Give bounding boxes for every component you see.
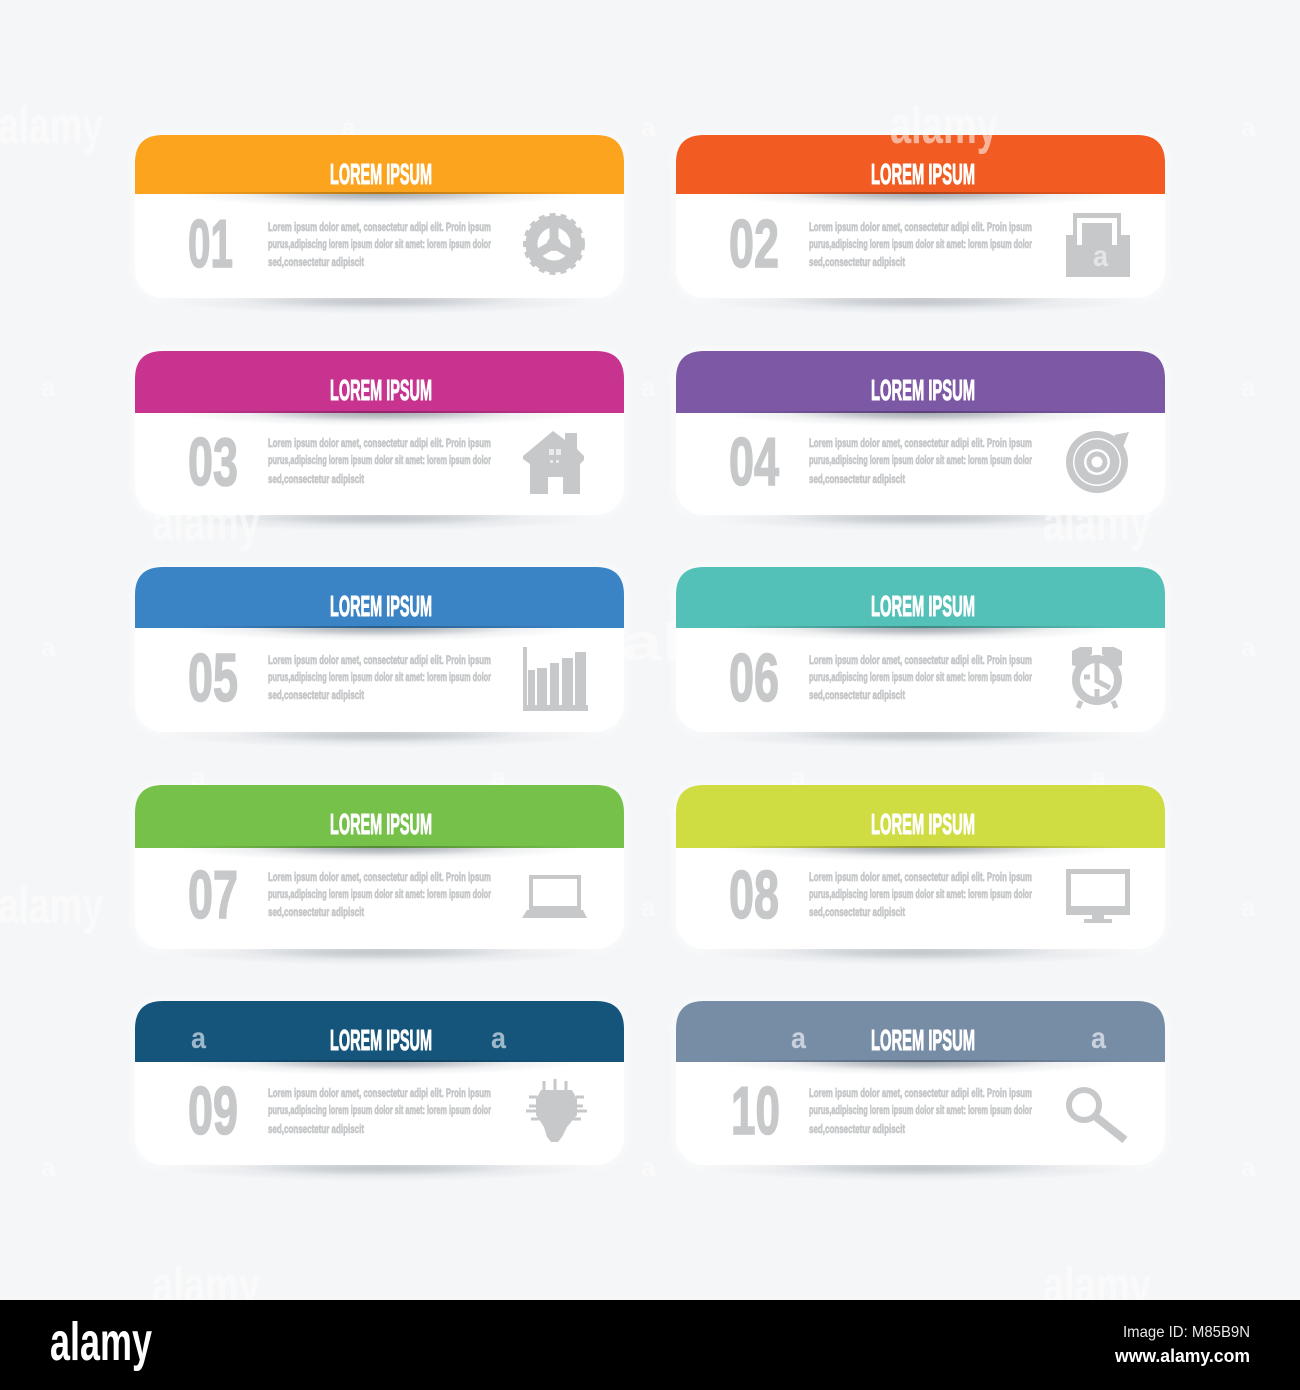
text block: purus,adipiscing lorem ipsum dolor sit amet: lorem ipsum dolor — [809, 889, 1032, 901]
text block: purus,adipiscing lorem ipsum dolor sit amet: lorem ipsum dolor — [268, 889, 491, 901]
logo: alamy: alamy — [50, 1312, 152, 1372]
header: green band — [135, 785, 624, 848]
watermarks: a — [41, 632, 56, 662]
text block: Lorem ipsum dolor amet, consectetur adipi elit. Proin ipsum — [809, 655, 1032, 667]
number 03: 03 — [188, 424, 238, 500]
text block: sed,consectetur adipiscit — [268, 907, 364, 919]
header: slate band — [676, 1001, 1165, 1062]
panel: card 09 — [132, 998, 627, 1197]
watermarks: alamy — [0, 877, 103, 935]
image id: Image ID: M85B9N — [1123, 1324, 1250, 1341]
text block: sed,consectetur adipiscit — [809, 1124, 905, 1136]
number 01: 01 — [188, 206, 233, 282]
watermark on band: alamy — [890, 97, 998, 155]
text block: Lorem ipsum dolor amet, consectetur adipi elit. Proin ipsum — [809, 438, 1032, 450]
watermark letters: a — [491, 1022, 506, 1055]
number 04: 04 — [729, 424, 779, 500]
watermarks: a — [491, 762, 506, 792]
watermark letters — [791, 1022, 1106, 1055]
text block: purus,adipiscing lorem ipsum dolor sit amet: lorem ipsum dolor — [268, 239, 491, 251]
header: teal band — [676, 567, 1165, 628]
header: navy band — [135, 1001, 624, 1062]
text block — [809, 1088, 1032, 1136]
text block — [268, 222, 491, 269]
text block: Lorem ipsum dolor amet, consectetur adipi elit. Proin ipsum — [809, 1088, 1032, 1100]
number 10: 10 — [731, 1073, 780, 1149]
text block: purus,adipiscing lorem ipsum dolor sit amet: lorem ipsum dolor — [268, 1105, 491, 1117]
watermarks: a — [1241, 372, 1256, 402]
website: www.alamy.com — [1114, 1346, 1250, 1366]
header: purple band — [676, 351, 1165, 413]
text block — [809, 438, 1032, 486]
text block: purus,adipiscing lorem ipsum dolor sit amet: lorem ipsum dolor — [268, 455, 491, 467]
icon: printer: a — [1093, 240, 1108, 273]
number 08: 08 — [729, 857, 779, 933]
watermarks: alamy — [0, 97, 103, 155]
header: blue band — [135, 567, 624, 628]
text block: sed,consectetur adipiscit — [809, 257, 905, 269]
text block: Lorem ipsum dolor amet, consectetur adipi elit. Proin ipsum — [268, 438, 491, 450]
text block: purus,adipiscing lorem ipsum dolor sit amet: lorem ipsum dolor — [268, 672, 491, 684]
watermarks: alamy — [152, 1257, 260, 1315]
icon: monitor — [1066, 869, 1130, 923]
footer bar — [0, 1300, 1300, 1390]
text block — [809, 222, 1032, 269]
text block: sed,consectetur adipiscit — [809, 474, 905, 486]
number 02: 02 — [729, 206, 779, 282]
number 06: 06 — [729, 640, 779, 716]
number 05: 05 — [188, 640, 238, 716]
watermarks: a — [791, 762, 806, 792]
icon: laptop — [522, 875, 587, 918]
number 09: 09 — [188, 1073, 238, 1149]
icon: house — [523, 431, 584, 494]
text block: purus,adipiscing lorem ipsum dolor sit amet: lorem ipsum dolor — [809, 672, 1032, 684]
text block: sed,consectetur adipiscit — [268, 257, 364, 269]
icon: target — [1066, 431, 1129, 493]
panel: card 10 — [673, 998, 1168, 1197]
icon: alarm clock — [1072, 647, 1122, 708]
number 07: 07 — [188, 857, 238, 933]
watermarks: a — [641, 372, 656, 402]
text block: Lorem ipsum dolor amet, consectetur adipi elit. Proin ipsum — [809, 872, 1032, 884]
watermarks: a — [41, 1152, 56, 1182]
heading: LOREM IPSUM — [871, 1025, 975, 1057]
watermarks: alamy — [1043, 1257, 1151, 1315]
panel: card 04 — [673, 348, 1168, 547]
watermark letters — [191, 1022, 506, 1055]
watermarks: a — [41, 372, 56, 402]
watermarks: a — [1091, 762, 1106, 792]
watermarks: a — [1241, 1152, 1256, 1182]
panel: card 05 — [132, 564, 627, 764]
text block: sed,consectetur adipiscit — [268, 1124, 364, 1136]
panel: card 08 — [673, 782, 1168, 981]
header: lime band — [676, 785, 1165, 848]
header: magenta band — [135, 351, 624, 413]
watermark letters: a — [191, 1022, 206, 1055]
watermarks: a — [641, 112, 656, 142]
heading: LOREM IPSUM — [871, 159, 975, 191]
watermark letters: a — [791, 1022, 806, 1055]
panel: card 02 — [673, 97, 1168, 330]
text block — [268, 655, 491, 702]
watermarks: a — [1241, 112, 1256, 142]
panel: card 01 — [132, 132, 627, 330]
panel: card 09: LOREM IPSUM — [330, 1025, 432, 1057]
watermark letters: a — [1091, 1022, 1106, 1055]
watermarks: a — [341, 112, 356, 142]
header: red-orange band — [676, 135, 1165, 194]
panel: card 06 — [673, 564, 1168, 764]
header: orange band — [135, 135, 624, 194]
watermarks: a — [191, 762, 206, 792]
text block: sed,consectetur adipiscit — [809, 690, 905, 702]
heading: LOREM IPSUM — [871, 591, 975, 623]
panel: card 03 — [132, 348, 627, 547]
text block: sed,consectetur adipiscit — [268, 474, 364, 486]
text block — [809, 872, 1032, 919]
watermarks over shadows — [152, 494, 1151, 552]
text block — [268, 438, 491, 486]
watermarks: al — [622, 614, 682, 672]
heading: LOREM IPSUM — [871, 375, 975, 407]
text block — [268, 872, 491, 919]
icon: bar chart — [523, 647, 588, 711]
panel: card 03: LOREM IPSUM — [330, 375, 432, 407]
icon: circuit bulb — [526, 1079, 587, 1142]
icon: gear — [525, 215, 583, 273]
text block: Lorem ipsum dolor amet, consectetur adipi elit. Proin ipsum — [268, 655, 491, 667]
watermarks: a — [1241, 892, 1256, 922]
text block: Lorem ipsum dolor amet, consectetur adipi elit. Proin ipsum — [268, 222, 491, 234]
text block: Lorem ipsum dolor amet, consectetur adipi elit. Proin ipsum — [268, 872, 491, 884]
panel: card 01: LOREM IPSUM — [330, 159, 432, 191]
panel: card 07 — [132, 782, 627, 981]
panel: card 07: LOREM IPSUM — [330, 809, 432, 841]
icon: printer — [1066, 213, 1130, 277]
watermarks: a — [1241, 632, 1256, 662]
panel: card 05: LOREM IPSUM — [330, 591, 432, 623]
watermarks over shadows: alamy — [152, 494, 260, 552]
text block: sed,consectetur adipiscit — [268, 690, 364, 702]
text block: sed,consectetur adipiscit — [809, 907, 905, 919]
watermarks: a — [641, 892, 656, 922]
text block: Lorem ipsum dolor amet, consectetur adipi elit. Proin ipsum — [268, 1088, 491, 1100]
text block: purus,adipiscing lorem ipsum dolor sit amet: lorem ipsum dolor — [809, 239, 1032, 251]
text block: purus,adipiscing lorem ipsum dolor sit amet: lorem ipsum dolor — [809, 455, 1032, 467]
watermarks over shadows: alamy — [1043, 494, 1151, 552]
text block: purus,adipiscing lorem ipsum dolor sit amet: lorem ipsum dolor — [809, 1105, 1032, 1117]
text block — [268, 1088, 491, 1136]
icon: magnifier — [1069, 1090, 1125, 1140]
watermarks: a — [641, 1152, 656, 1182]
text block — [809, 655, 1032, 702]
text block: Lorem ipsum dolor amet, consectetur adipi elit. Proin ipsum — [809, 222, 1032, 234]
heading: LOREM IPSUM — [871, 809, 975, 841]
